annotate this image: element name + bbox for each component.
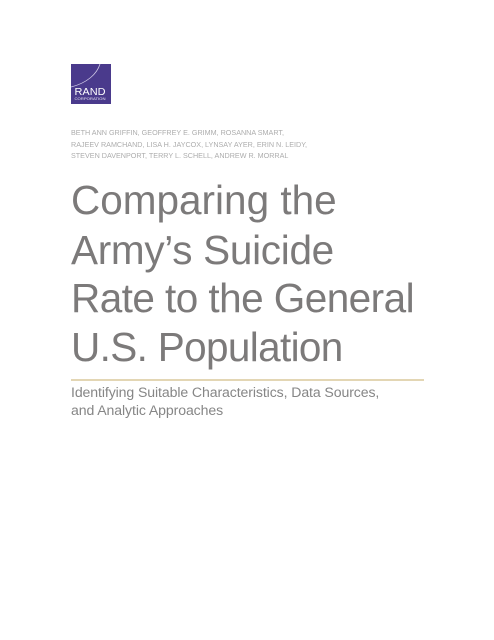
subtitle: Identifying Suitable Characteristics, Data Sources, [71, 384, 379, 400]
logo: RAND Corporation: RAND [74, 86, 106, 98]
subtitle [71, 384, 379, 418]
title: Army’s Suicide [71, 227, 334, 273]
title: U.S. Population [71, 324, 343, 370]
authors: STEVEN DAVENPORT, TERRY L. SCHELL, ANDREW R. MORRAL [71, 151, 288, 160]
logo: RAND Corporation: CORPORATION [74, 97, 106, 101]
authors: BETH ANN GRIFFIN, GEOFFREY E. GRIMM, ROSANNA SMART, [71, 128, 284, 137]
authors: RAJEEV RAMCHAND, LISA H. JAYCOX, LYNSAY AYER, ERIN N. LEIDY, [71, 140, 307, 149]
subtitle: and Analytic Approaches [71, 402, 223, 418]
authors [71, 128, 307, 160]
title [71, 177, 414, 370]
title: Comparing the [71, 177, 337, 223]
logo: RAND Corporation [71, 64, 111, 104]
title: Rate to the General [71, 275, 414, 321]
